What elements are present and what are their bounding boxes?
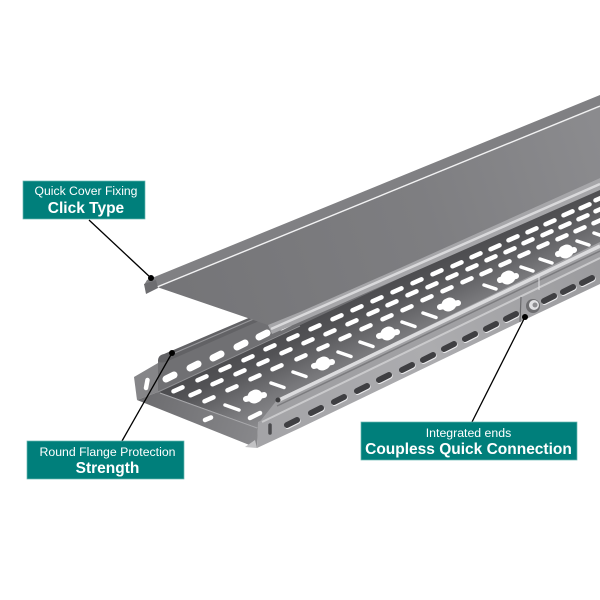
label text: Round Flange Protection: [39, 445, 176, 459]
label heading: Coupless Quick Connection: [365, 441, 572, 458]
round flange front: [258, 242, 600, 424]
label heading: Strength: [76, 460, 139, 477]
leader line: [472, 317, 525, 422]
label text: Integrated ends: [426, 426, 511, 440]
label box: [361, 422, 577, 460]
leader dot: [522, 314, 528, 320]
cover front lip: [268, 178, 600, 334]
label box: [23, 181, 145, 219]
coupling joint and bolt: [520, 276, 540, 322]
cover white crease: [157, 106, 600, 287]
label heading: Click Type: [48, 200, 125, 217]
leader dot: [148, 275, 154, 281]
end plate vertical slots: [146, 380, 148, 388]
tray underside lip: [137, 392, 258, 448]
round flange back: [158, 296, 300, 362]
floor fold line: [158, 326, 300, 392]
callout: couple connection: [361, 314, 577, 460]
leader line: [122, 353, 172, 441]
cover main surface: [157, 107, 600, 325]
leader dot: [169, 350, 175, 356]
floor slots rows: [174, 196, 600, 401]
floor cross holes: [246, 250, 574, 399]
label text: Quick Cover Fixing: [35, 184, 137, 198]
floor front slots: [205, 413, 260, 420]
tray floor: [158, 184, 600, 428]
floor transverse slots: [225, 233, 600, 410]
tray back wall: [158, 170, 600, 392]
label box: [27, 441, 184, 479]
tray left end plate: [134, 363, 158, 400]
cover click end: [144, 280, 158, 294]
cable tray: [134, 170, 600, 448]
back wall oval holes: [166, 323, 289, 379]
front wall slots: [288, 279, 593, 426]
tray front wall: [257, 257, 600, 448]
callout: click type: [23, 181, 154, 281]
callout: strength: [27, 350, 184, 479]
tray cover: [144, 95, 600, 334]
leader line: [89, 220, 151, 278]
cover top strip: [144, 95, 600, 288]
